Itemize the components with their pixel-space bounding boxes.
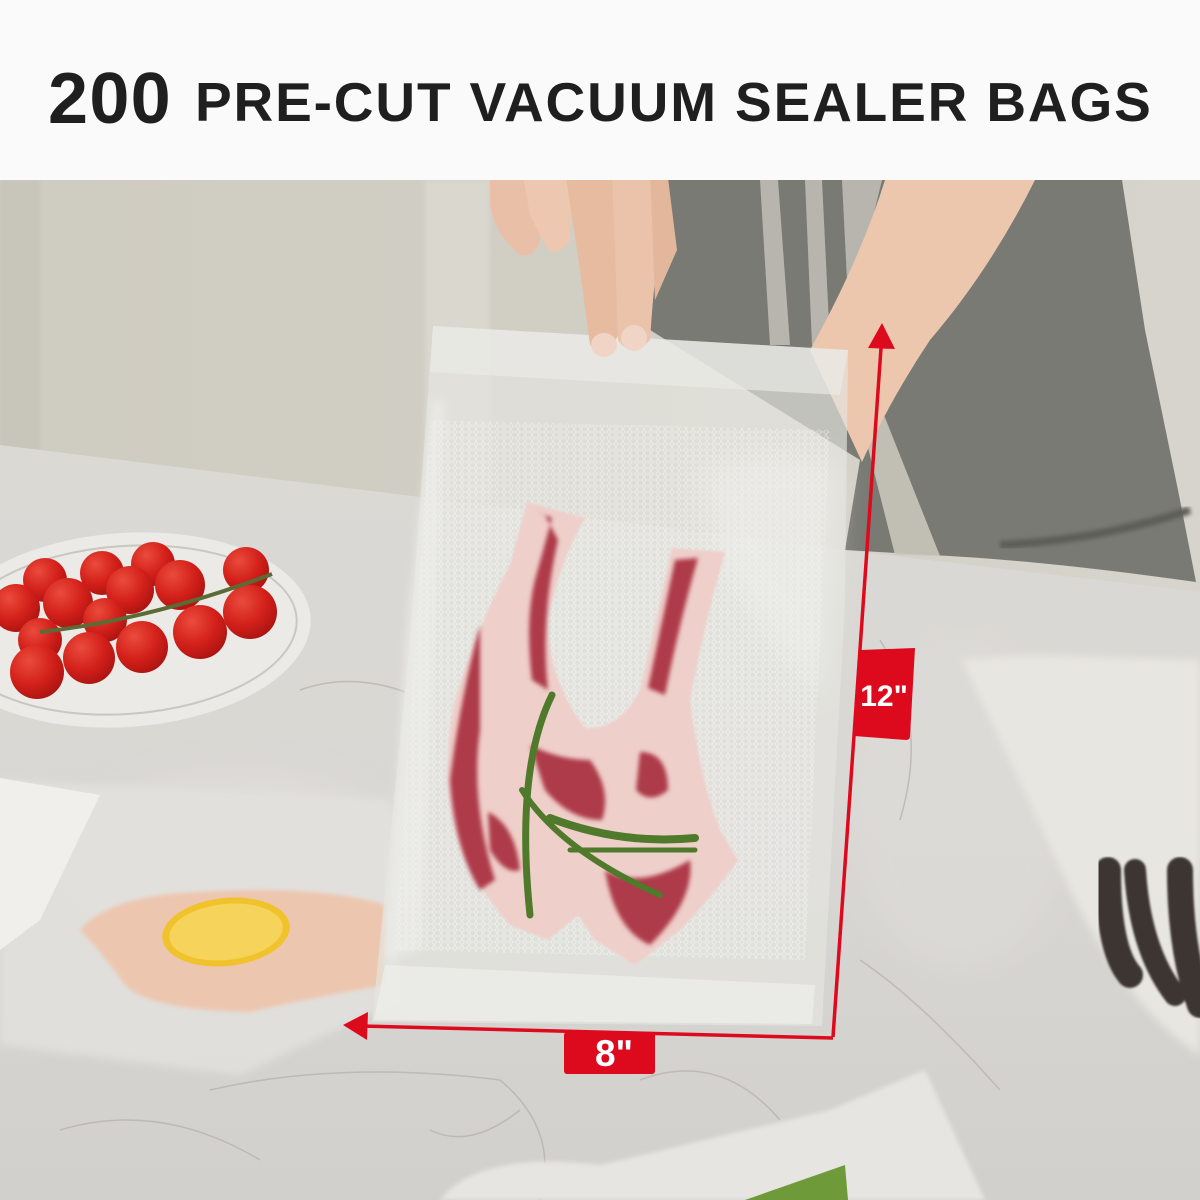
arm: [810, 180, 1035, 462]
plate of cherry tomatoes: [0, 532, 310, 728]
marble counter: [0, 445, 1200, 1200]
right bag with shrimp: [962, 655, 1200, 1055]
apron: [650, 180, 1196, 582]
dimension arrow: width: [343, 1012, 833, 1074]
lamb chops: [448, 502, 738, 965]
label: 12 inches: [854, 648, 915, 740]
title: PRE-CUT VACUUM SEALER BAGS: [195, 71, 1153, 133]
bottom bag with greens: [440, 1070, 985, 1200]
dimension arrow: height: [833, 323, 915, 1037]
wall background: [0, 180, 1200, 600]
label: 8 inches: 8": [595, 1033, 633, 1074]
rosemary sprig: [522, 695, 695, 915]
title: [0, 0, 1200, 180]
title: 200: [48, 59, 172, 139]
hand holding bag: [490, 170, 677, 357]
label: 12 inches: 12": [860, 680, 908, 713]
side bag with chicken and lemon: [0, 778, 400, 1075]
label: 8 inches: [564, 1032, 655, 1074]
main vacuum bag: [372, 326, 848, 1026]
